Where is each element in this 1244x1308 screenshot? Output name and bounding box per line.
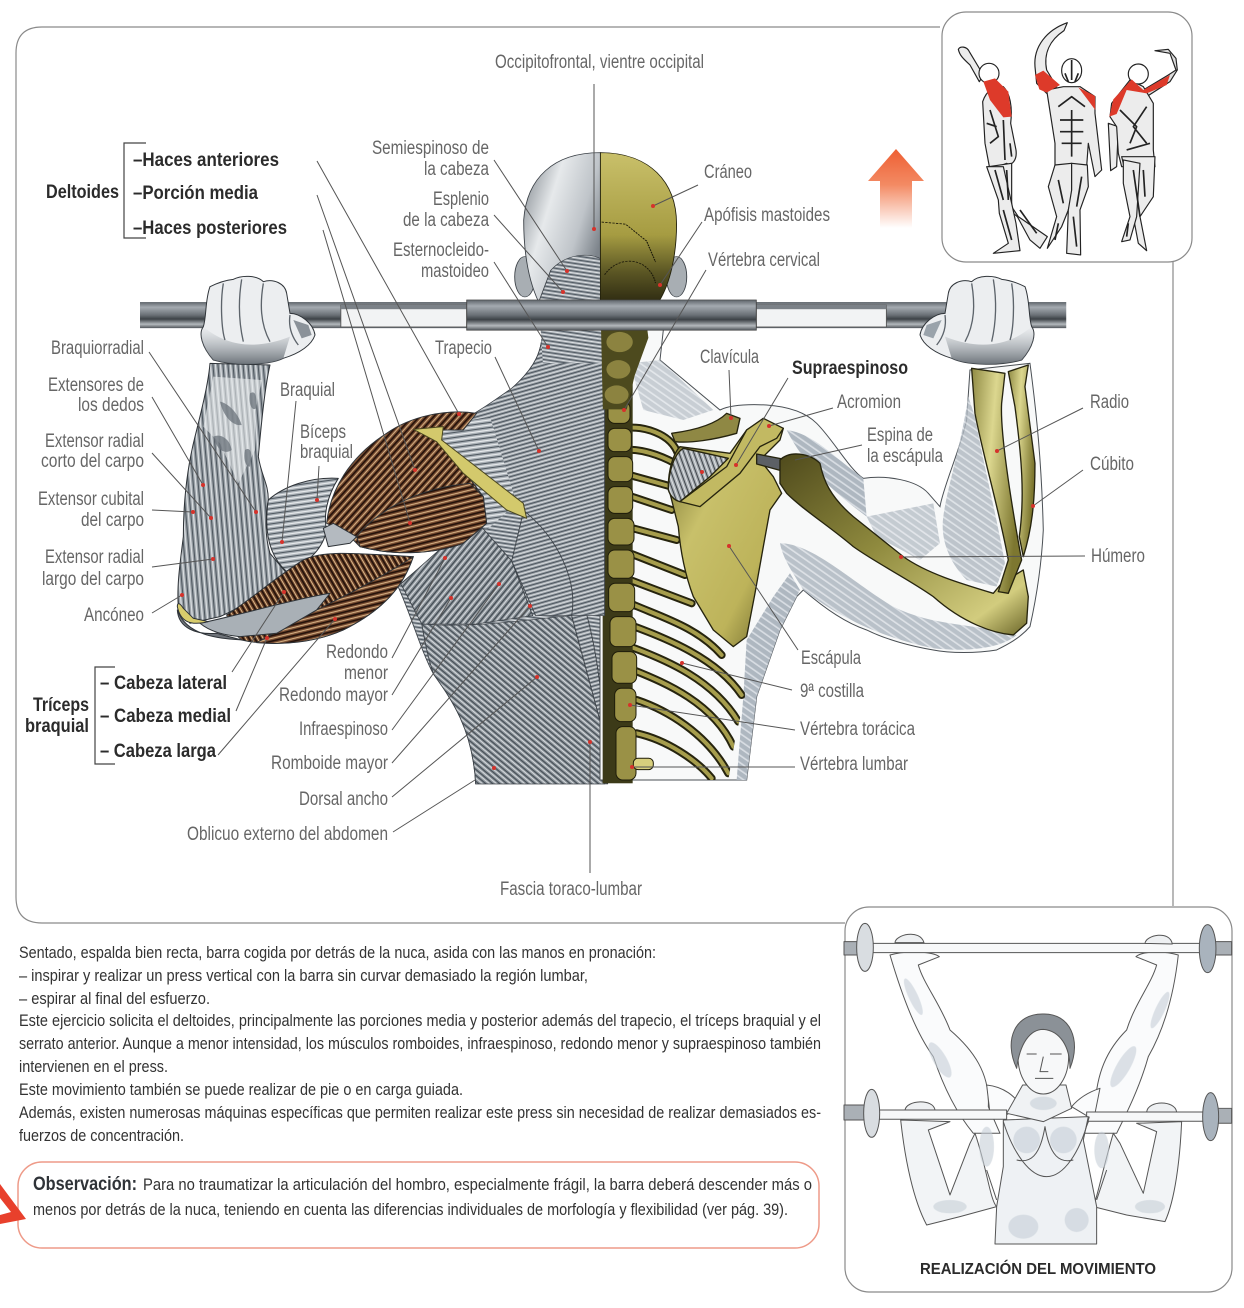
- label: supraespinoso: Supraespinoso: [792, 358, 908, 379]
- left arm: [177, 363, 527, 644]
- skull sutures: [602, 222, 656, 283]
- label: cúbito: Cúbito: [1090, 454, 1134, 475]
- label: extensores de los dedos: los dedos: [78, 395, 144, 416]
- label: extensor radial largo: Extensor radial: [45, 547, 144, 568]
- label: esplenio: [403, 189, 489, 231]
- body text: – inspirar y realizar un press vertical con la barra sin curvar demasiado la región lumbar,: [19, 966, 588, 985]
- label: semiespinoso: Semiespinoso de: [372, 138, 489, 159]
- deltoid group legend: [46, 143, 287, 239]
- label: vértebra cervical: Vértebra cervical: [708, 250, 820, 271]
- label: romboide mayor: Romboide mayor: [271, 753, 389, 774]
- label: extensores de los dedos: Extensores de: [48, 375, 144, 396]
- figure: side view: [958, 47, 1047, 253]
- triceps: [227, 553, 413, 643]
- spine: [603, 330, 633, 783]
- label: bíceps braquial: braquial: [300, 442, 353, 463]
- anatomical illustration: back view with barbell: [140, 153, 1066, 784]
- barbell: [140, 300, 1066, 330]
- label: braquiorradial: Braquiorradial: [51, 338, 144, 359]
- radius: [972, 368, 1022, 593]
- body text: – espirar al final del esfuerzo.: [19, 989, 210, 1008]
- label: extensor cubital: [38, 489, 144, 531]
- neck muscles over head: [539, 255, 603, 302]
- hair: [1011, 1014, 1074, 1068]
- label: vértebra torácica: Vértebra torácica: [800, 719, 915, 740]
- label: esplenio: Esplenio: [433, 189, 489, 210]
- head left half: [524, 153, 600, 302]
- scapula and shoulder bones: [668, 365, 1035, 647]
- chest and neckline: [987, 1117, 1107, 1200]
- body text: Este ejercicio solicita el deltoides, principalmente las porciones media y posterior además del trapecio, el tríceps braquial y el: [19, 1011, 821, 1030]
- label: trapecio: Trapecio: [435, 338, 492, 359]
- figure: rear view: [1108, 49, 1177, 251]
- label: semiespinoso: la cabeza: [424, 159, 489, 180]
- neck shading: [630, 360, 713, 420]
- forearm shading: [943, 397, 1005, 587]
- label: extensor radial largo: [42, 547, 144, 590]
- biceps and brachialis: [267, 478, 338, 572]
- label: bíceps braquial: [300, 422, 353, 463]
- tendon: [757, 454, 797, 474]
- label: redondo menor: Redondo: [326, 642, 388, 663]
- observation callout: [0, 1162, 819, 1248]
- label: clavícula: Clavícula: [700, 347, 759, 368]
- label: espina de la escápula: Espina de: [867, 425, 933, 446]
- scapula: [668, 423, 783, 647]
- leader lines: [149, 84, 1085, 873]
- label: espina de la escápula: [867, 425, 943, 467]
- body text: serrato anterior. Aunque a menor intensidad, los músculos romboides, infraespinoso, redondo menor y supraespinoso también: [19, 1034, 821, 1053]
- humerus: [780, 454, 1028, 635]
- ribs: [620, 428, 742, 778]
- deltoides heading: Deltoides: [46, 182, 119, 203]
- label: apófisis mastoides: Apófisis mastoides: [704, 205, 830, 226]
- label: extensor cubital: del carpo: [81, 510, 144, 531]
- top barbell position: [844, 923, 1232, 973]
- body text: [19, 943, 821, 1145]
- label: redondo mayor: Redondo mayor: [279, 685, 389, 706]
- body text: Este movimiento también se puede realizar de pie o en carga guiada.: [19, 1080, 463, 1099]
- cervical vertebrae: [600, 300, 648, 409]
- label: esternocleidomastoideo: Esternocleido-: [393, 240, 489, 261]
- right hand: [920, 276, 1034, 364]
- haces posteriores: –Haces posteriores: [133, 218, 287, 239]
- main frame: [16, 27, 1173, 923]
- head neck and barbell: [140, 153, 1066, 409]
- label: esplenio: de la cabeza: [403, 210, 489, 231]
- neck: [1007, 1085, 1072, 1122]
- head: [1018, 1019, 1069, 1094]
- observation text: Para no traumatizar la articulación del hombro, especialmente frágil, la barra deberá descender más o: [143, 1175, 812, 1194]
- scapular spine: [680, 418, 783, 507]
- supraspinatus: [668, 448, 728, 502]
- shoulders: [987, 1085, 1100, 1117]
- label: redondo menor: [326, 642, 389, 684]
- body text: Sentado, espalda bien recta, barra cogida por detrás de la nuca, asida con las manos en pronación:: [19, 943, 656, 962]
- rib cage and spine: [603, 330, 742, 783]
- label: infraespinoso: Infraespinoso: [299, 719, 388, 740]
- body text: Además, existen numerosas máquinas específicas que permiten realizar este press sin necesidad de realizar demasiados es-: [19, 1103, 821, 1122]
- icon: warning triangle: [0, 1184, 26, 1224]
- bent arms: [901, 1120, 1182, 1225]
- bottom barbell position: [844, 1089, 1232, 1141]
- label: 9ª costilla: 9ª costilla: [800, 681, 864, 702]
- teres and infraspinatus: [401, 527, 533, 624]
- shoulder shading: [787, 430, 867, 517]
- label: bíceps braquial: Bíceps: [300, 422, 346, 443]
- label: ancóneo: Ancóneo: [84, 605, 144, 626]
- clavicle: [672, 413, 740, 442]
- deltoid tendon: [323, 523, 357, 547]
- neck below head: [539, 300, 605, 363]
- label: extensor radial corto: corto del carpo: [41, 451, 144, 472]
- right torso and arm: [600, 330, 1043, 780]
- label: extensor radial largo: largo del carpo: [42, 569, 144, 590]
- inset panel: realización del movimiento: [844, 907, 1232, 1292]
- label: extensor radial corto: Extensor radial: [45, 431, 144, 452]
- tríceps braquial heading: [25, 695, 89, 737]
- label: escápula: Escápula: [801, 648, 861, 669]
- tríceps braquial heading: Tríceps: [33, 695, 89, 716]
- label: oblicuo externo: Oblicuo externo del abdomen: [187, 824, 388, 845]
- torso in tank top: [995, 1117, 1097, 1244]
- label: cráneo: Cráneo: [704, 162, 752, 183]
- forearm tendon patches: [213, 392, 256, 467]
- red marker dots: [180, 204, 1035, 770]
- triceps tendon: [200, 593, 330, 637]
- raised arms: [890, 952, 1178, 1133]
- ulna: [1008, 365, 1035, 557]
- deltoid: [327, 412, 487, 553]
- label: vértebra lumbar: Vértebra lumbar: [800, 754, 909, 775]
- left back muscles: [398, 325, 608, 784]
- skull right half: [600, 153, 677, 302]
- label: esternocleidomastoideo: [393, 240, 489, 282]
- label: húmero: Húmero: [1091, 546, 1145, 567]
- label: dorsal ancho: Dorsal ancho: [299, 789, 388, 810]
- triceps lower fibres: [257, 557, 413, 644]
- trapezius left: [452, 325, 605, 616]
- face: [1027, 1054, 1062, 1078]
- upper arm shading: [867, 503, 940, 560]
- label: fascia toraco-lumbar: Fascia toraco-lumbar: [500, 879, 643, 900]
- anatomical labels: [38, 52, 1145, 900]
- figure: front view: [1035, 23, 1102, 255]
- body text: intervienen en el press.: [19, 1057, 168, 1076]
- observation text: [33, 1174, 812, 1219]
- tríceps braquial heading: braquial: [25, 716, 89, 737]
- label: radio: Radio: [1090, 392, 1129, 413]
- inset panel: muscles worked figures: [942, 12, 1192, 262]
- forearm veins highlight: [203, 377, 262, 483]
- label: occipitofrontal: Occipitofrontal, vientre occipital: [495, 52, 704, 73]
- scapular spine left: [413, 427, 527, 518]
- label: acromion: Acromion: [837, 392, 901, 413]
- shading: [901, 977, 1173, 1239]
- forearm: [178, 363, 287, 623]
- triceps group legend: [25, 667, 231, 764]
- deltoid lower head: [357, 483, 487, 553]
- cabeza lateral: – Cabeza lateral: [100, 673, 227, 694]
- lower arm shading: [780, 543, 1017, 650]
- movement caption: REALIZACIÓN DEL MOVIMIENTO: [920, 1260, 1156, 1278]
- label: semiespinoso: [372, 138, 489, 180]
- ears: [515, 257, 687, 297]
- trapezius lower: [512, 510, 605, 738]
- upward movement arrow: [868, 149, 924, 228]
- label: extensor cubital: Extensor cubital: [38, 489, 144, 510]
- latissimus dorsi: [422, 616, 605, 784]
- observation text: menos por detrás de la nuca, teniendo en cuenta las diferencias individuales de morfología y flexibilidad (ver pág. 39).: [33, 1200, 788, 1219]
- label: extensor radial corto: [41, 431, 144, 472]
- label: esternocleidomastoideo: mastoideo: [421, 261, 489, 282]
- body text: fuerzos de concentración.: [19, 1126, 184, 1145]
- label: espina de la escápula: la escápula: [867, 446, 943, 467]
- label: extensores de los dedos: [48, 375, 144, 416]
- tissue behind scapular spine: [437, 417, 517, 530]
- left hand: [201, 276, 315, 364]
- porción media: –Porción media: [133, 183, 258, 204]
- haces anteriores: –Haces anteriores: [133, 150, 279, 171]
- lateral flank shading: [737, 573, 800, 780]
- cabeza medial: – Cabeza medial: [100, 706, 231, 727]
- elbow: [177, 604, 208, 623]
- label: redondo menor: menor: [344, 663, 389, 684]
- label: braquial: Braquial: [280, 380, 335, 401]
- observation text: Observación:: [33, 1174, 137, 1195]
- cabeza larga: – Cabeza larga: [100, 741, 216, 762]
